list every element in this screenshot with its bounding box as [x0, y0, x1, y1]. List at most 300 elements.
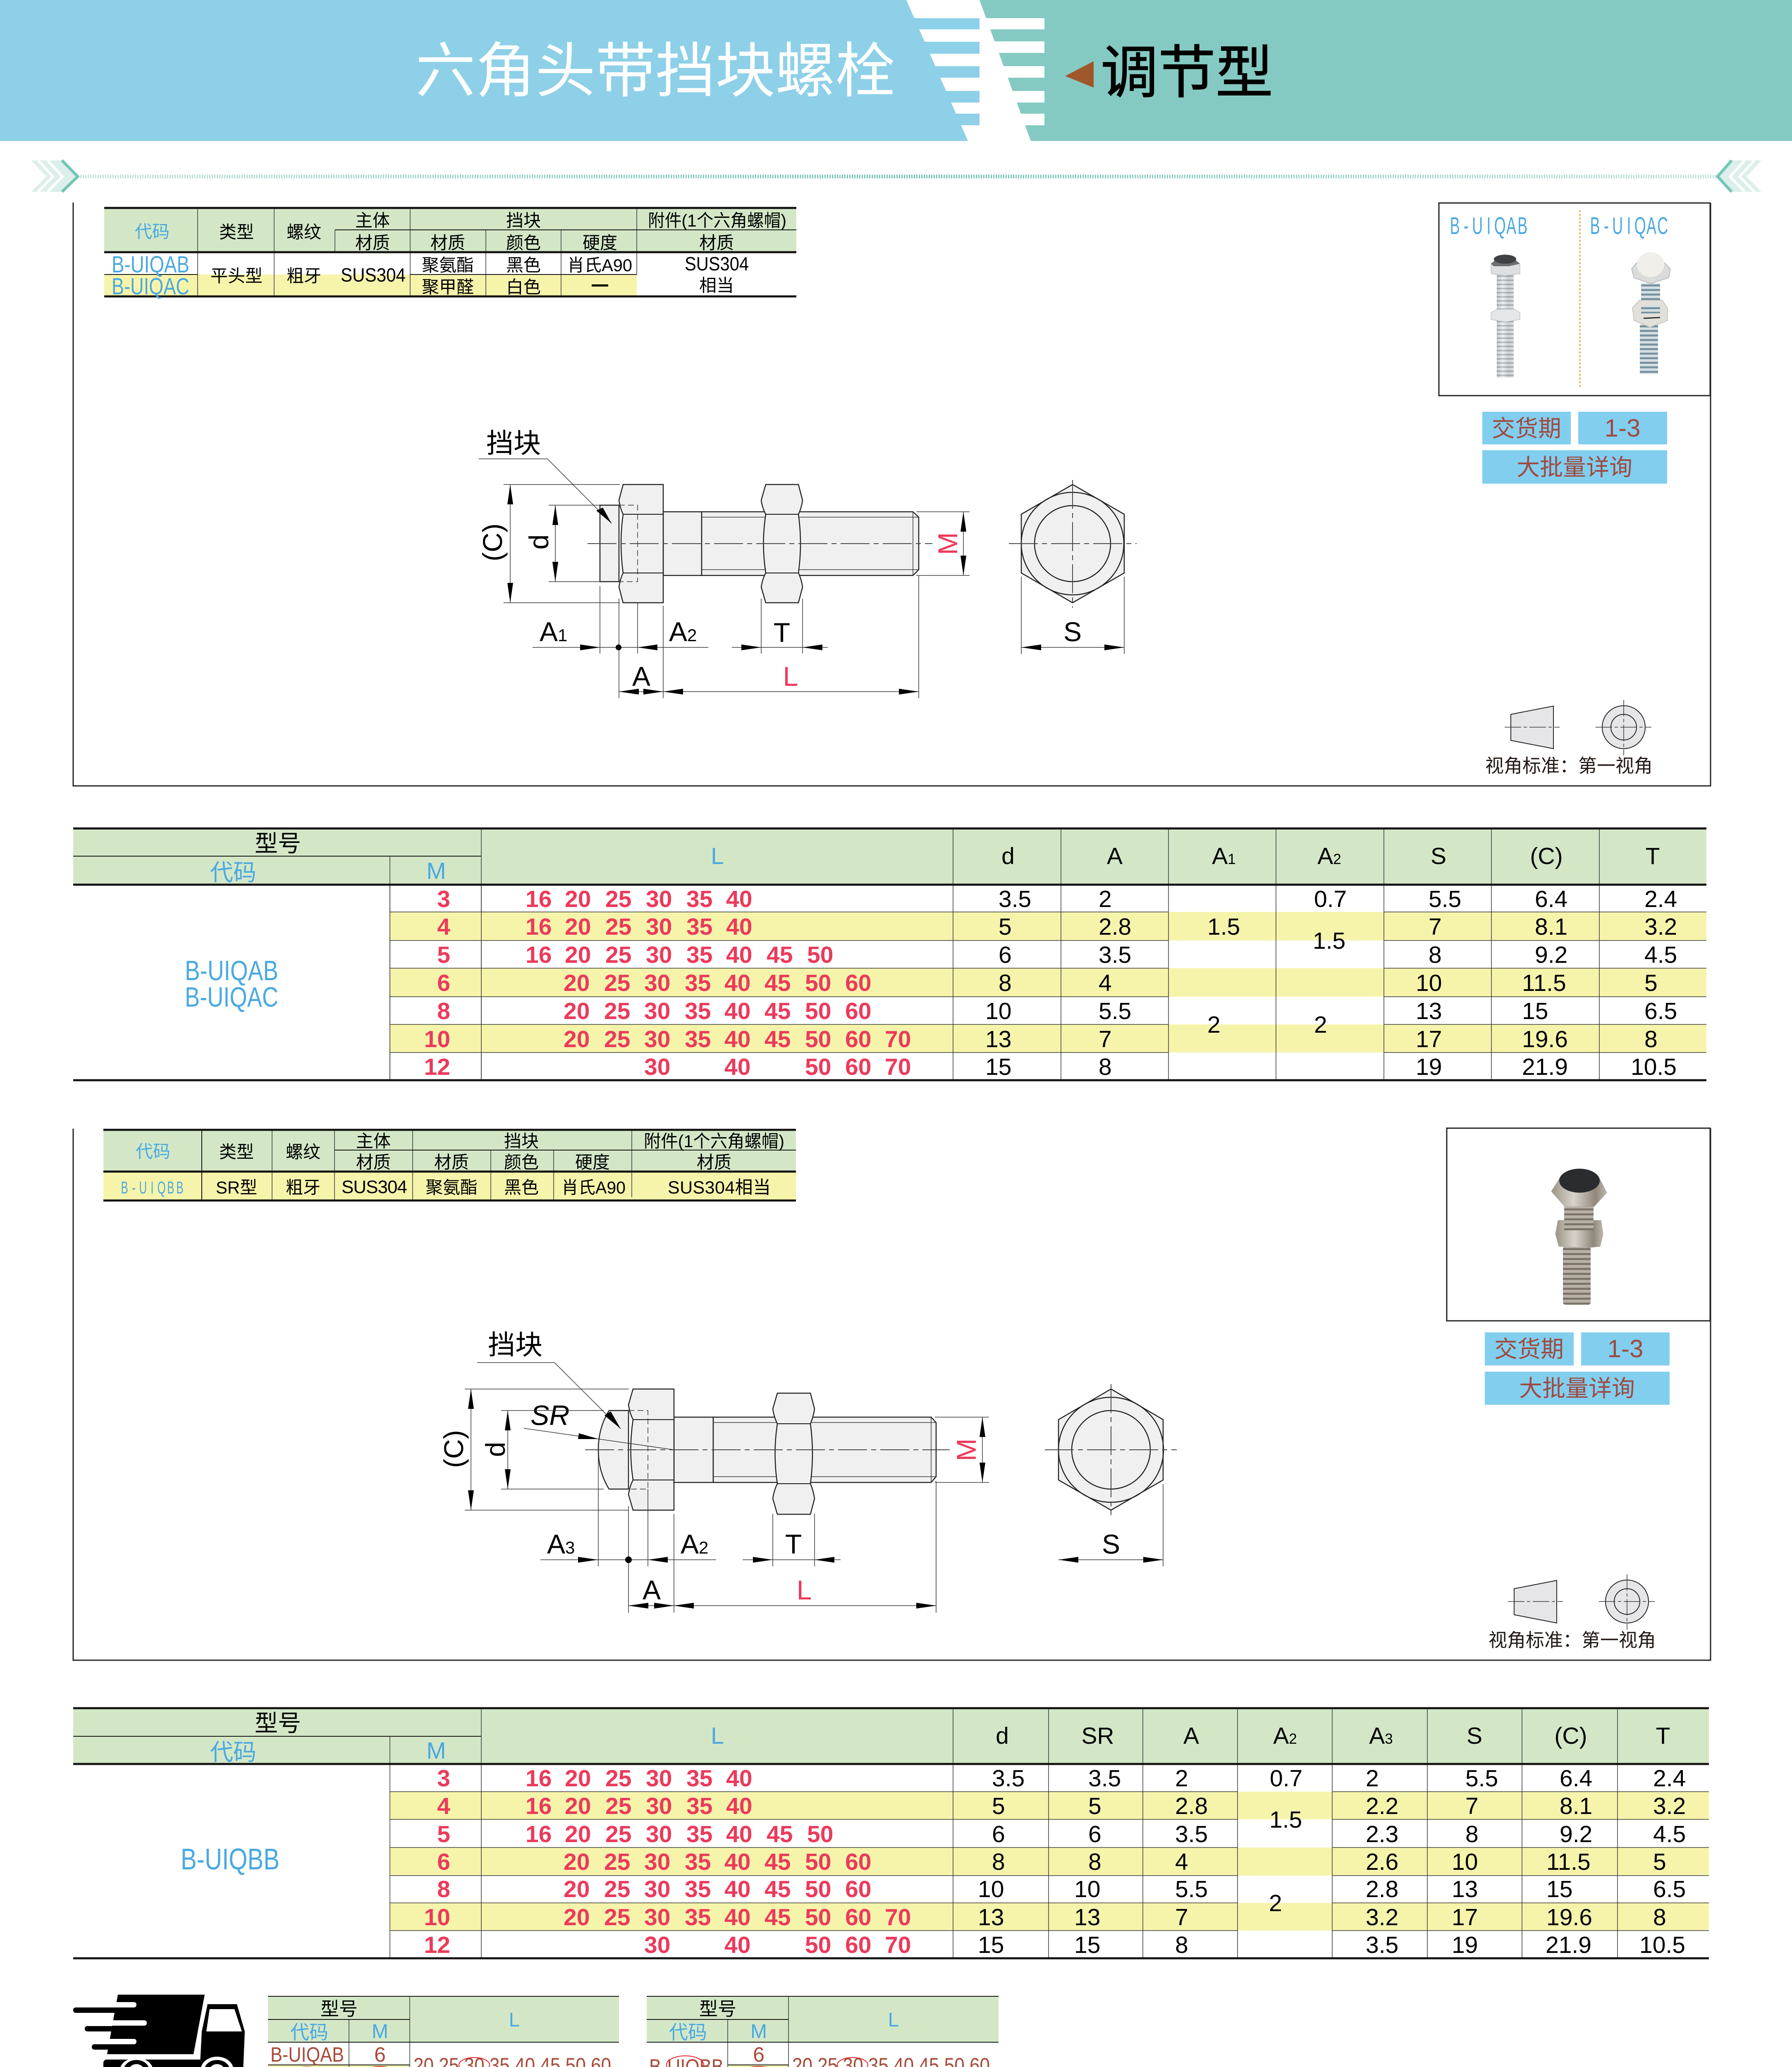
yellow row stripes — [390, 1792, 1709, 1931]
badge: delivery days — [1578, 412, 1667, 444]
numeric columns: 6.5 — [1653, 1876, 1686, 1902]
numeric columns: 10 — [1416, 970, 1442, 996]
grid lines — [390, 1764, 1709, 1958]
numeric columns: 11.5 — [1546, 1849, 1591, 1875]
spec table 2: 代码 — [136, 1142, 170, 1161]
L column: 35 — [685, 1026, 711, 1053]
badge: bulk inquiry — [1482, 450, 1667, 484]
numeric columns: 19 — [1416, 1054, 1442, 1080]
spec table 1: 材质 — [355, 233, 390, 253]
L column: 50 — [805, 970, 831, 996]
L column: 30 — [646, 914, 672, 940]
title: 六角头带挡块螺栓 — [416, 38, 895, 105]
L column — [526, 1765, 911, 1958]
L column: 40 — [724, 1932, 750, 1958]
L column: 40 — [724, 1849, 750, 1875]
spec table 2: 附件(1个六角螺帽) — [644, 1131, 784, 1151]
numeric columns: 8 — [1175, 1932, 1188, 1958]
spec table 1: 颜色 — [506, 233, 541, 253]
L column: 40 — [724, 1054, 750, 1080]
numeric columns: 2.8 — [1099, 914, 1131, 940]
extension lines and bottom dimensions: L — [797, 1575, 812, 1605]
numeric columns: 19 — [1452, 1932, 1478, 1958]
numeric columns: 6.5 — [1644, 998, 1677, 1024]
panel: product 1 frame — [73, 203, 1711, 786]
numeric columns: 17 — [1416, 1026, 1442, 1053]
numeric columns: 13 — [1416, 998, 1442, 1024]
L column: 40 — [724, 970, 750, 996]
table header: d — [1001, 843, 1015, 869]
icon: bolt photo B-UIQBB — [1551, 1169, 1607, 1305]
L column: 40 — [724, 1026, 750, 1053]
icon: delivery truck — [73, 1995, 245, 2067]
table header: S — [1431, 843, 1446, 869]
M column: 10 — [424, 1026, 450, 1053]
L column: 25 — [604, 998, 630, 1024]
spec table 1: B-UIQAB — [112, 251, 189, 278]
table header: 代码 — [210, 1739, 256, 1765]
L column: 45 — [765, 1876, 791, 1902]
L column: 60 — [845, 1876, 871, 1902]
table header: SR — [1081, 1723, 1114, 1749]
spec table 1: 代码 — [135, 222, 170, 241]
model codes: B-UIQAB — [185, 955, 278, 986]
L column — [526, 886, 911, 1080]
selection circles — [288, 2057, 490, 2067]
dimension (C) — [477, 485, 620, 603]
L column: 20 — [565, 1765, 591, 1792]
table header: L — [711, 843, 724, 869]
icon: first-angle projection symbol 1 — [1485, 700, 1653, 776]
L column: 25 — [605, 1821, 631, 1847]
numeric columns: 4.5 — [1653, 1821, 1686, 1847]
hex end view — [1045, 1384, 1177, 1515]
dimension d: d — [480, 1442, 511, 1457]
numeric columns: 10 — [978, 1876, 1004, 1902]
numeric columns: 8.1 — [1560, 1793, 1592, 1819]
numeric columns: 8 — [1465, 1821, 1479, 1847]
order example table 1: 代码 — [290, 2022, 328, 2043]
numeric columns: 1.5 — [1207, 914, 1240, 940]
numeric columns: 5 — [1653, 1849, 1666, 1875]
L column: 60 — [845, 1849, 871, 1875]
table header: T — [1646, 843, 1660, 869]
L column: 30 — [644, 1876, 670, 1902]
table header: M — [426, 1738, 446, 1764]
badge: delivery label: 交货期 — [1492, 415, 1561, 442]
icon: first-angle projection symbol 1: 视角标准：第一视角 — [1485, 755, 1653, 776]
spec table 2: 肖氏A90 — [561, 1178, 626, 1197]
spec table 2: 主体 — [356, 1131, 391, 1151]
L column: 35 — [686, 942, 712, 968]
L column: 50 — [805, 1932, 831, 1958]
photo label B-UIQAB: B-UIQAB — [1450, 212, 1527, 239]
table header: T — [1656, 1723, 1670, 1749]
order example table 1: B-UIQAB — [270, 2043, 344, 2066]
L column: 20 — [564, 1876, 590, 1902]
L column: 45 — [765, 970, 791, 996]
numeric columns: 2 — [1314, 1012, 1327, 1038]
numeric columns: 5.5 — [1099, 998, 1131, 1024]
table header — [73, 1708, 1709, 1765]
spec table 2 — [103, 1129, 796, 1201]
L column: 45 — [767, 1821, 793, 1847]
technical drawing 1 — [477, 428, 1137, 698]
numeric columns: 10 — [1074, 1876, 1100, 1902]
L column: 25 — [605, 942, 631, 968]
extension lines and bottom dimensions: T — [774, 617, 790, 648]
photo label B-UIQAC: B-UIQAC — [1590, 212, 1668, 239]
dimension S: S — [1063, 616, 1082, 647]
numeric columns: 5.5 — [1429, 886, 1461, 912]
L column: 20 — [564, 1026, 590, 1053]
label: stopper leader — [477, 1329, 621, 1429]
L column: 25 — [604, 1904, 630, 1931]
spec table 2: 挡块 — [504, 1131, 539, 1151]
L column: 50 — [805, 998, 831, 1024]
order example table 2: 代码 — [669, 2022, 707, 2043]
order example table 1 — [268, 1996, 619, 2067]
table header: A1 — [1212, 843, 1236, 869]
spec table 1: 类型 — [219, 222, 254, 242]
L column: 25 — [605, 886, 631, 912]
numeric columns — [978, 1765, 1686, 1958]
numeric columns: 7 — [1175, 1904, 1188, 1931]
L column: 60 — [845, 1904, 871, 1931]
numeric columns: 15 — [1546, 1876, 1572, 1902]
numeric columns: 8 — [1429, 942, 1442, 968]
numeric columns: 17 — [1452, 1904, 1478, 1931]
dimension S — [1021, 577, 1124, 654]
model code: B-UIQBB — [181, 1843, 280, 1876]
numeric columns: 21.9 — [1522, 1054, 1568, 1080]
numeric columns: 2 — [1099, 886, 1112, 912]
numeric columns: 2.3 — [1366, 1821, 1398, 1847]
order example table 2: L — [888, 2009, 899, 2031]
panel: product photos 1 — [1439, 203, 1710, 396]
spec table 2: B-UIQBB — [121, 1178, 184, 1198]
L column: 40 — [726, 1793, 752, 1819]
label: SR radius: SR — [530, 1400, 569, 1431]
L column: 35 — [685, 1876, 711, 1902]
dimension (C): (C) — [438, 1430, 469, 1468]
M column: 12 — [424, 1932, 450, 1958]
L column: 20 — [564, 1849, 590, 1875]
numeric columns: 2.4 — [1644, 886, 1677, 912]
spec table 2: 聚氨酯 — [425, 1178, 478, 1197]
panel: product 2 frame — [73, 1128, 1711, 1660]
M column: 8 — [437, 998, 450, 1024]
table rules — [73, 828, 1706, 1080]
numeric columns: 5.5 — [1175, 1876, 1208, 1902]
label: stopper leader: 挡块 — [486, 428, 541, 458]
spec table 2: 硬度 — [575, 1153, 610, 1172]
L column: 40 — [726, 1765, 752, 1792]
numeric columns: 8 — [1088, 1849, 1101, 1875]
spec table 1: SUS304 — [685, 253, 749, 274]
L column: 40 — [724, 998, 750, 1024]
L column: 40 — [726, 886, 752, 912]
numeric columns: 6.4 — [1560, 1765, 1592, 1792]
table header: (C) — [1530, 843, 1563, 869]
L column: 30 — [646, 886, 672, 912]
L column: 16 — [526, 1793, 552, 1819]
spec table 1: 硬度 — [583, 233, 617, 253]
L column: 60 — [845, 998, 871, 1024]
M column: 8 — [437, 1876, 450, 1902]
numeric columns: 2 — [1366, 1765, 1379, 1792]
order example table 2: 6 — [753, 2043, 765, 2066]
numeric columns: 3.5 — [1088, 1765, 1121, 1792]
numeric columns: 8 — [1653, 1904, 1666, 1931]
hex end view — [1009, 480, 1137, 608]
numeric columns: 15 — [1074, 1932, 1100, 1958]
L column: 30 — [644, 970, 670, 996]
numeric columns: 3.2 — [1653, 1793, 1686, 1819]
numeric columns: 3.5 — [1366, 1932, 1398, 1958]
L column: 40 — [726, 914, 752, 940]
table header: 型号 — [255, 831, 301, 857]
L column: 30 — [644, 1932, 670, 1958]
numeric columns: 10.5 — [1631, 1054, 1677, 1080]
spec table 2: 颜色 — [504, 1153, 539, 1172]
dimension M — [935, 1417, 989, 1482]
spec table 2: 螺纹 — [286, 1142, 320, 1162]
table header: M — [426, 858, 446, 884]
numeric columns: 13 — [1452, 1876, 1478, 1902]
M column: 3 — [437, 886, 450, 912]
L column: 30 — [646, 1765, 672, 1792]
L column: 45 — [767, 942, 793, 968]
extension lines and bottom dimensions: T — [785, 1529, 802, 1559]
dimension d — [523, 505, 600, 582]
badge: delivery days — [1581, 1332, 1670, 1365]
numeric columns: 19.6 — [1546, 1904, 1592, 1931]
spec table 1: 挡块 — [506, 211, 541, 230]
L column: 20 — [564, 1904, 590, 1931]
spec table 1: 材质 — [430, 233, 465, 253]
order example table 1: 型号 — [320, 1998, 358, 2019]
spec table 1: 材质 — [699, 233, 734, 253]
dimension M — [916, 512, 970, 575]
L column: 40 — [726, 942, 752, 968]
numeric columns: 3.5 — [1099, 942, 1131, 968]
badge: bulk inquiry: 大批量详询 — [1517, 454, 1632, 480]
spec table 1 — [104, 208, 796, 300]
extension lines and bottom dimensions: A2 — [681, 1529, 708, 1559]
numeric columns: 4 — [1099, 970, 1112, 996]
L column: 20 — [564, 998, 590, 1024]
arrow: brown pointer — [1065, 61, 1094, 88]
spec table 1: 聚甲醛 — [422, 277, 474, 297]
numeric columns: 2 — [1269, 1890, 1282, 1917]
numeric columns: 21.9 — [1546, 1932, 1591, 1958]
M column: 3 — [437, 1765, 450, 1792]
numeric columns: 0.7 — [1314, 886, 1347, 912]
table header: A3 — [1369, 1723, 1393, 1749]
table header: L — [711, 1723, 724, 1749]
dimension table 2 — [73, 1708, 1709, 1958]
L column: 60 — [845, 1054, 871, 1080]
L column: 20 — [565, 886, 591, 912]
badge: delivery days: 1-3 — [1608, 1335, 1643, 1363]
table header: (C) — [1554, 1723, 1587, 1749]
numeric columns: 15 — [985, 1054, 1011, 1080]
numeric columns: 8 — [1644, 1026, 1658, 1053]
L column: 16 — [526, 1821, 552, 1847]
L column: 50 — [805, 1876, 831, 1902]
order example table 2: M — [750, 2021, 767, 2043]
numeric columns: 9.2 — [1535, 942, 1567, 968]
label: stopper leader — [479, 428, 612, 523]
dimension S: S — [1102, 1529, 1120, 1559]
table header: A2 — [1317, 843, 1341, 869]
L column: 25 — [605, 914, 631, 940]
L column: 45 — [765, 1026, 791, 1053]
spec table 1: 聚氨酯 — [422, 255, 474, 275]
subtitle: 调节型 — [1101, 41, 1273, 105]
numeric columns: 3.5 — [992, 1765, 1025, 1792]
spec table 1: 白色 — [506, 277, 541, 297]
L column: 30 — [644, 1849, 670, 1875]
technical drawing 2 — [438, 1329, 1177, 1613]
model codes: B-UIQAC — [185, 981, 278, 1013]
M column — [424, 1765, 450, 1958]
L column: 70 — [885, 1904, 911, 1931]
numeric columns: 0.7 — [1270, 1765, 1302, 1792]
table rules — [73, 1708, 1709, 1958]
extension lines and bottom dimensions — [540, 1455, 936, 1613]
table header — [73, 828, 1706, 1080]
numeric columns: 7 — [1465, 1793, 1479, 1819]
L column: 35 — [685, 998, 711, 1024]
numeric columns: 3.2 — [1644, 914, 1677, 940]
L column: 45 — [765, 998, 791, 1024]
icon: first-angle projection symbol 2 — [1489, 1574, 1656, 1651]
numeric columns: 2 — [1175, 1765, 1188, 1792]
numeric columns: 3.5 — [999, 886, 1031, 912]
numeric columns: 5 — [999, 914, 1012, 940]
numeric columns: 8 — [1099, 1054, 1112, 1080]
badge: delivery label — [1482, 412, 1571, 444]
numeric columns: 13 — [1074, 1904, 1100, 1931]
numeric columns: 6 — [992, 1821, 1005, 1847]
spec table 2: SR型 — [216, 1178, 257, 1197]
table header: S — [1467, 1723, 1482, 1749]
L column: 40 — [724, 1904, 750, 1931]
numeric columns: 5 — [992, 1793, 1005, 1819]
L column: 40 — [724, 1876, 750, 1902]
L column: 50 — [807, 942, 833, 968]
label: stopper leader: 挡块 — [488, 1329, 542, 1360]
spec table 2: 粗牙 — [286, 1178, 320, 1197]
L column: 30 — [644, 1904, 670, 1931]
order example table 2: 型号 — [699, 1998, 736, 2019]
table header: 型号 — [255, 1710, 301, 1736]
model codes — [185, 955, 278, 1013]
numeric columns: 3.2 — [1366, 1904, 1398, 1931]
badge: delivery days: 1-3 — [1605, 414, 1640, 442]
order example table 1: 6 — [374, 2043, 386, 2066]
M column: 6 — [437, 970, 450, 996]
M column: 12 — [424, 1054, 450, 1080]
numeric columns: 7 — [1099, 1026, 1112, 1053]
yellow row stripes — [390, 912, 1706, 1053]
numeric columns: 10 — [985, 998, 1011, 1024]
table header: 代码 — [210, 859, 256, 886]
icon: bolt photo B-UIQAB — [1491, 255, 1520, 377]
M column — [424, 886, 450, 1080]
extension lines and bottom dimensions: A — [643, 1575, 661, 1605]
L column: 35 — [685, 1849, 711, 1875]
L column: 35 — [686, 1793, 712, 1819]
numeric columns: 8 — [992, 1849, 1005, 1875]
L column: 70 — [885, 1026, 911, 1053]
spec table 1: B-UIQAC — [112, 273, 189, 300]
L column: 70 — [885, 1932, 911, 1958]
M column: 4 — [437, 914, 450, 940]
badge: delivery label — [1485, 1332, 1574, 1365]
L column: 16 — [526, 914, 552, 940]
spec table 1: 相当 — [699, 276, 734, 295]
L column: 60 — [845, 1932, 871, 1958]
numeric columns: 2.8 — [1366, 1876, 1398, 1902]
L column: 70 — [885, 1054, 911, 1080]
extension lines and bottom dimensions: A2 — [669, 616, 697, 647]
dimension d: d — [523, 535, 554, 549]
icon: first-angle projection symbol 2: 视角标准：第一视角 — [1489, 1630, 1656, 1651]
extension lines and bottom dimensions: A3 — [547, 1529, 575, 1559]
spec table 2: 材质 — [697, 1153, 731, 1172]
L column: 35 — [685, 970, 711, 996]
L column: 50 — [805, 1904, 831, 1931]
spec table 2: 材质 — [356, 1153, 391, 1172]
L column: 20 — [565, 914, 591, 940]
L column: 60 — [845, 1026, 871, 1053]
spec table 1: 附件(1个六角螺帽) — [648, 211, 786, 230]
spec table 1: 螺纹 — [287, 222, 321, 242]
L column: 50 — [805, 1026, 831, 1053]
numeric columns: 4 — [1175, 1849, 1188, 1875]
label: SR radius — [524, 1400, 674, 1450]
extension lines and bottom dimensions: A1 — [540, 616, 567, 647]
numeric columns: 2.6 — [1366, 1849, 1398, 1875]
L column: 30 — [646, 942, 672, 968]
numeric columns: 13 — [978, 1904, 1004, 1931]
dimension M: M — [932, 532, 963, 555]
header banner — [0, 0, 1792, 141]
dimension S — [1058, 1484, 1163, 1566]
dimension (C) — [438, 1389, 629, 1510]
L column: 25 — [604, 1876, 630, 1902]
dimension d — [480, 1411, 604, 1489]
numeric columns: 5.5 — [1465, 1765, 1498, 1792]
numeric columns: 2.4 — [1653, 1765, 1686, 1792]
numeric columns: 6.4 — [1535, 886, 1567, 912]
dimension table 1 — [73, 828, 1706, 1080]
spec table 1: 肖氏A90 — [567, 255, 632, 275]
L column: 35 — [686, 1821, 712, 1847]
numeric columns: 19.6 — [1522, 1026, 1568, 1053]
L column: 16 — [526, 886, 552, 912]
spec table 2: 类型 — [219, 1142, 254, 1162]
grid lines — [390, 885, 1706, 1080]
table header: A — [1107, 843, 1123, 869]
table header: d — [996, 1723, 1009, 1749]
icon: bolt photo B-UIQAC — [1632, 252, 1670, 374]
table header: A2 — [1273, 1723, 1297, 1749]
M column: 5 — [437, 1821, 450, 1847]
